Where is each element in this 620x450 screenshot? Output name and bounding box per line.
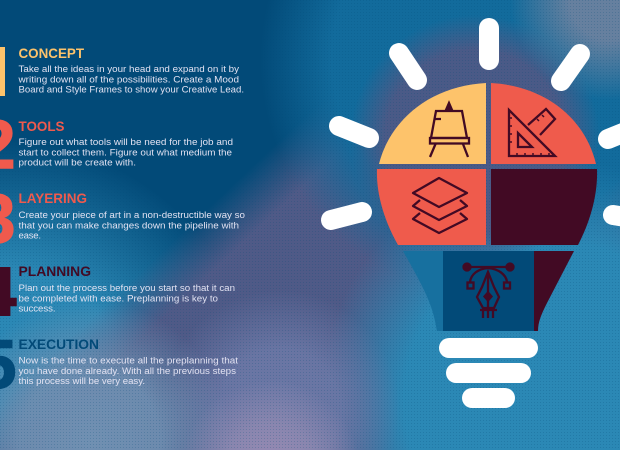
neck: plum shade [534, 251, 574, 331]
neck: center [443, 251, 535, 331]
text: tools body: start to collect them. Figure out what medium the [18, 148, 232, 158]
text: planning body: success. [18, 304, 56, 314]
heading: tools: TOOLS [18, 118, 64, 134]
icon: easel [430, 103, 469, 157]
panel: step 2 tools [0, 106, 233, 183]
text: planning body: Plan out the process before you start so that it can [18, 283, 235, 294]
text: concept body: writing down all of the possibilities. Create a Mood [17, 74, 239, 86]
text: concept body: Take all the ideas in your head and expand on it by [18, 64, 239, 75]
text: execution body [18, 356, 238, 387]
text: tools body [18, 137, 233, 168]
heading: concept: CONCEPT [18, 45, 84, 61]
text: execution body: this process will be very easy. [18, 376, 145, 387]
panel: step 3 layering [0, 180, 245, 257]
quadrant: red top right [491, 83, 596, 164]
quadrant: yellow [379, 83, 486, 164]
heading: execution: EXECUTION [18, 336, 99, 352]
light bulb [331, 28, 620, 408]
text: layering body: that you can make changes down the pipeline with [18, 220, 239, 232]
icon: layers [413, 178, 467, 233]
text: layering body: ease. [18, 230, 41, 242]
text: concept body: Board and Style Frames to show your Creative Lead. [18, 84, 244, 96]
text: tools body: Figure out what tools will be need for the job and [18, 137, 233, 148]
neck: left shade [403, 251, 445, 331]
number 1: 1 [0, 92, 3, 98]
base pills [439, 338, 538, 408]
text: concept body [17, 64, 244, 96]
icon: set square and ruler [509, 109, 555, 156]
icon: pen tool [464, 264, 514, 318]
quadrant: red lower left [377, 169, 486, 245]
text: tools body: product will be create with. [18, 158, 136, 168]
quadrant: plum [491, 169, 597, 245]
number 1 [0, 47, 5, 98]
text: planning body: be completed with ease. Preplanning is key to [18, 294, 218, 304]
text: layering body: Create your piece of art in a non-destructible way so [18, 210, 245, 221]
panel: step 4 planning [0, 253, 235, 330]
rays [331, 28, 620, 220]
text: execution body: you have done already. With all the previous steps [18, 366, 236, 377]
panel: step 1 concept [0, 45, 244, 98]
text: planning body [18, 283, 235, 314]
text: execution body: Now is the time to execute all the preplanning that [18, 356, 238, 366]
panel: step 5 execution [0, 326, 238, 403]
heading: layering: LAYERING [18, 190, 87, 206]
text: layering body [18, 210, 245, 242]
heading: planning: PLANNING [18, 263, 91, 279]
